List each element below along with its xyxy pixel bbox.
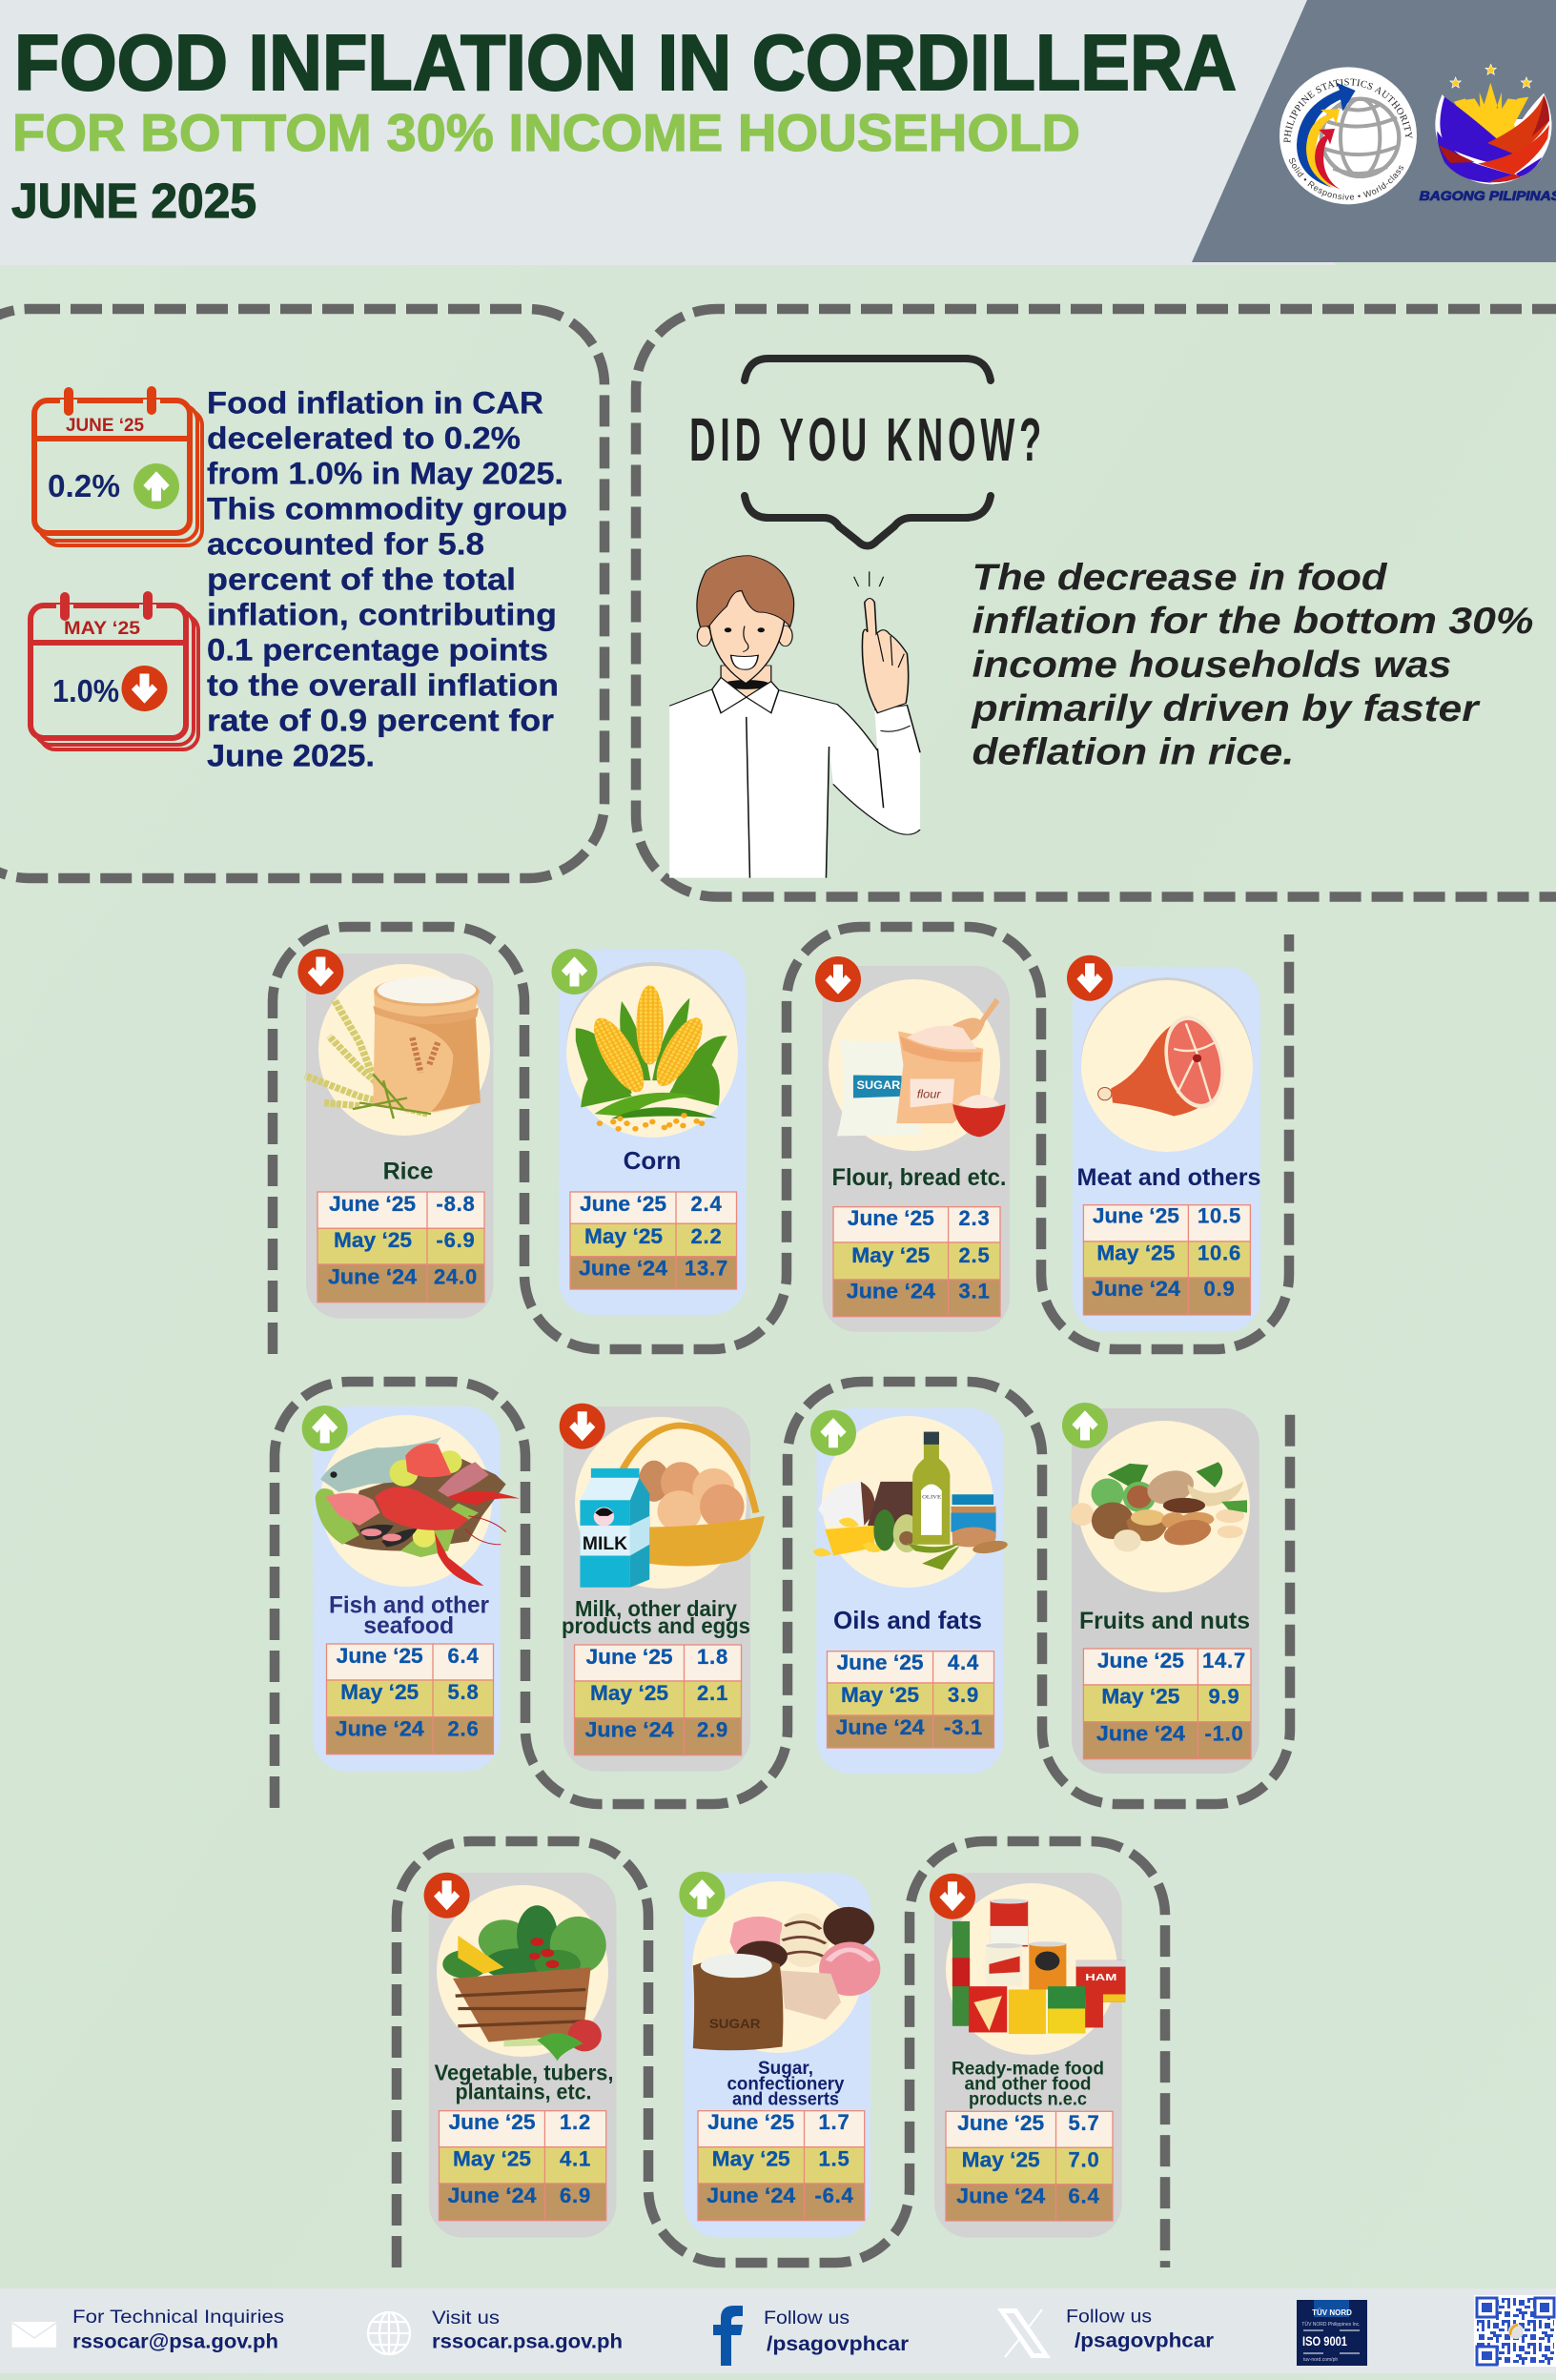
table <box>828 1651 993 1748</box>
text: did you know fact: inflation for the bottom 30% <box>972 601 1533 642</box>
table: 6.4 <box>1069 2185 1099 2208</box>
table: June ‘25 <box>1093 1204 1179 1228</box>
table: June ‘25 <box>580 1192 666 1216</box>
contact: X <box>1066 2308 1214 2352</box>
badge: down arrow <box>930 1874 975 1919</box>
badge: up arrow <box>810 1410 856 1456</box>
table: -8.8 <box>436 1192 476 1216</box>
QR code <box>1474 2295 1556 2367</box>
label: plantains, etc. <box>456 2080 591 2104</box>
table: 2.9 <box>697 1718 728 1742</box>
text: food inflation summary: 0.1 percentage points <box>207 633 548 667</box>
table: May ‘25 <box>340 1680 419 1704</box>
text: food inflation summary: percent of the total <box>207 563 516 597</box>
text: did you know fact: The decrease in food <box>972 557 1388 598</box>
text: food inflation summary: Food inflation in CAR <box>207 385 543 420</box>
date: JUNE 2025 <box>11 174 256 228</box>
table: May ‘25 <box>962 2147 1040 2171</box>
table: June ‘24 <box>328 1265 418 1289</box>
contact: facebook <box>764 2308 909 2355</box>
badge: up arrow <box>302 1405 348 1451</box>
label: Corn <box>624 1146 681 1175</box>
table: 4.4 <box>948 1651 979 1674</box>
table: 0.9 <box>1204 1277 1235 1301</box>
table: June ‘25 <box>848 1206 934 1230</box>
text: food inflation summary: decelerated to 0.2% <box>207 421 521 456</box>
text: food inflation summary <box>207 385 567 773</box>
icon: calendar June 2025: JUNE ‘25 <box>66 416 144 436</box>
badge: down arrow <box>815 956 861 1002</box>
table: 2.1 <box>697 1681 728 1705</box>
icon: vegetable crate <box>442 1905 606 2061</box>
table: 3.1 <box>959 1280 990 1303</box>
label: and other food <box>965 2074 1091 2095</box>
contact: X: /psagovphcar <box>1075 2330 1214 2352</box>
contact: website: rssocar.psa.gov.ph <box>432 2331 623 2353</box>
text: food inflation summary: accounted for 5.8 <box>207 526 484 561</box>
text: food inflation summary: from 1.0% in May 2025. <box>207 456 563 490</box>
contact: website: Visit us <box>432 2308 500 2329</box>
icon: seafood platter <box>316 1437 520 1586</box>
label: Fish and other <box>329 1592 489 1619</box>
table <box>698 2110 865 2221</box>
table: May ‘25 <box>851 1243 930 1267</box>
badge: down arrow <box>560 1404 605 1449</box>
table: May ‘25 <box>1101 1685 1179 1709</box>
icon: canned goods: HAM <box>1085 1972 1116 1982</box>
icon: flour sack: SUGAR <box>857 1079 900 1092</box>
label: Vegetable, tubers, <box>435 2061 614 2085</box>
table <box>833 1206 1000 1317</box>
dashed border: row 2 <box>275 1382 1290 1808</box>
text: food inflation summary: June 2025. <box>207 739 375 773</box>
icon: sugar and sweets: SUGAR <box>709 2016 761 2031</box>
table: 24.0 <box>434 1265 478 1289</box>
table: June ‘24 <box>448 2184 537 2207</box>
table: 6.4 <box>448 1644 479 1668</box>
label: seafood <box>363 1612 454 1639</box>
table <box>946 2111 1113 2221</box>
label <box>329 1592 489 1639</box>
table: June ‘24 <box>847 1280 936 1303</box>
table: June ‘24 <box>585 1718 674 1742</box>
table <box>570 1192 736 1289</box>
badge: up arrow <box>551 949 597 995</box>
badge: ISO 9001: TÜV NORD Philippines Inc. <box>1301 2321 1361 2328</box>
table <box>326 1644 494 1754</box>
table <box>317 1192 484 1303</box>
table: May ‘25 <box>334 1228 412 1252</box>
icon: oils and fats: OLIVE <box>922 1495 942 1500</box>
table: June ‘24 <box>579 1257 668 1281</box>
label: products and eggs <box>562 1613 750 1638</box>
contact: email: For Technical Inquiries <box>72 2308 284 2328</box>
text: did you know fact: primarily driven by faster <box>971 688 1481 729</box>
logo: Bagong Pilipinas: BAGONG PILIPINAS <box>1420 188 1556 203</box>
icon: calendar June 2025 <box>34 391 202 545</box>
table: 5.8 <box>448 1680 479 1704</box>
text: food inflation summary: This commodity group <box>207 492 567 526</box>
text: did you know fact: deflation in rice. <box>972 732 1295 773</box>
table: June ‘25 <box>448 2110 536 2134</box>
table: 4.1 <box>560 2147 591 2171</box>
table: -3.1 <box>944 1715 983 1739</box>
table: May ‘25 <box>841 1683 919 1707</box>
table: 2.4 <box>691 1192 722 1216</box>
dashed border: row 1 <box>273 927 1289 1354</box>
text: food inflation summary: inflation, contributing <box>207 597 557 631</box>
table: May ‘25 <box>453 2147 531 2171</box>
title: FOOD INFLATION IN CORDILLERA <box>14 18 1237 107</box>
table: June ‘24 <box>1096 1722 1186 1746</box>
badge: down arrow <box>424 1873 470 1918</box>
table: May ‘25 <box>1096 1241 1175 1265</box>
table: 9.9 <box>1209 1685 1239 1709</box>
table: 2.6 <box>448 1717 479 1741</box>
table: 7.0 <box>1069 2147 1099 2171</box>
label: Oils and fats <box>833 1606 982 1634</box>
table: 2.5 <box>959 1243 990 1267</box>
icon: oils and fats <box>813 1432 1009 1570</box>
label: Fruits and nuts <box>1079 1608 1250 1634</box>
icon: milk carton and eggs <box>580 1426 765 1588</box>
label: products n.e.c <box>969 2089 1087 2110</box>
card: fruits and nuts <box>1062 1403 1259 1774</box>
text: food inflation summary: rate of 0.9 percent for <box>207 704 554 738</box>
logo: Philippine Statistics Authority: Solid • Responsive • World-class <box>1289 158 1403 200</box>
table: 10.6 <box>1198 1241 1241 1265</box>
label <box>952 2059 1104 2110</box>
speech bubble <box>745 359 991 545</box>
table: 13.7 <box>685 1257 728 1281</box>
contact: email: rssocar@psa.gov.ph <box>72 2331 278 2353</box>
icon: flour sack <box>837 998 1006 1137</box>
label: Rice <box>383 1159 433 1185</box>
icon: nuts <box>1070 1462 1247 1551</box>
subtitle: FOR BOTTOM 30% INCOME HOUSEHOLD <box>12 103 1080 162</box>
icon: rice sack <box>305 976 481 1118</box>
table: May ‘25 <box>590 1681 668 1705</box>
table: 14.7 <box>1202 1649 1246 1672</box>
card: vegetables <box>424 1873 616 2238</box>
label: Sugar, <box>758 2058 813 2079</box>
icon: globe <box>368 2312 410 2354</box>
table: 5.7 <box>1069 2111 1099 2135</box>
panel: food inflation summary <box>0 309 604 878</box>
table: June ‘25 <box>585 1645 673 1669</box>
table: June ‘25 <box>707 2110 794 2134</box>
contact: facebook: Follow us <box>764 2308 850 2329</box>
label: Flour, bread etc. <box>831 1164 1007 1191</box>
illustration: man pointing up <box>669 556 920 878</box>
header panel <box>0 0 1556 265</box>
table: 2.2 <box>691 1224 722 1248</box>
badge: up arrow <box>1062 1403 1108 1448</box>
table <box>574 1645 742 1755</box>
badge: down arrow <box>297 949 343 995</box>
table: June ‘24 <box>835 1715 925 1739</box>
table: -1.0 <box>1204 1722 1244 1746</box>
table: 1.2 <box>560 2110 591 2134</box>
table: June ‘25 <box>837 1651 923 1674</box>
text: food inflation summary: to the overall inflation <box>207 667 559 702</box>
table: May ‘25 <box>584 1224 663 1248</box>
badge: ISO 9001: TÜV NORD <box>1312 2308 1352 2317</box>
card: rice <box>297 949 494 1319</box>
card: milk and eggs <box>560 1404 765 1772</box>
label: confectionery <box>727 2074 845 2095</box>
panel: did you know <box>636 309 1556 896</box>
logo: Philippine Statistics Authority <box>1280 67 1417 204</box>
footer bar <box>0 2288 1556 2373</box>
table: 1.8 <box>697 1645 728 1669</box>
label <box>727 2058 845 2110</box>
table: -6.9 <box>436 1228 476 1252</box>
icon: calendar June 2025: 0.2% <box>48 468 120 503</box>
icon: calendar May 2025: MAY ‘25 <box>64 619 140 639</box>
table <box>439 2110 606 2221</box>
label: Milk, other dairy <box>575 1596 737 1621</box>
icon: X <box>999 2309 1049 2357</box>
table: 2.3 <box>959 1206 990 1230</box>
card: fish and seafood <box>302 1405 520 1772</box>
icon: calendar May 2025 <box>31 596 198 749</box>
label <box>562 1596 750 1638</box>
logo: Bagong Pilipinas <box>1420 64 1556 203</box>
table: 3.9 <box>948 1683 979 1707</box>
card: oils and fats <box>810 1408 1009 1774</box>
dashed border: row 3 <box>397 1841 1165 2267</box>
table: -6.4 <box>814 2184 854 2207</box>
table: June ‘25 <box>1097 1649 1184 1672</box>
label: and desserts <box>732 2089 839 2110</box>
table: June ‘25 <box>337 1644 423 1668</box>
icon: facebook <box>713 2306 743 2366</box>
icon: corn <box>576 985 727 1129</box>
contact: email <box>72 2308 284 2353</box>
icon: envelope <box>11 2322 56 2348</box>
table: June ‘25 <box>957 2111 1044 2135</box>
table: June ‘24 <box>956 2185 1046 2208</box>
badge: ISO 9001 <box>1297 2300 1367 2366</box>
card: meat <box>1067 955 1260 1332</box>
logo: Philippine Statistics Authority: PHILIPPINE STATISTICS AUTHORITY <box>1283 78 1413 143</box>
label <box>435 2061 614 2104</box>
icon: calendar May 2025: 1.0% <box>52 673 119 708</box>
text: did you know fact <box>971 557 1533 773</box>
contact: X: Follow us <box>1066 2308 1152 2328</box>
label: Ready-made food <box>952 2059 1104 2080</box>
heading: did you know: DID YOU KNOW? <box>689 405 1046 474</box>
card: sugar and desserts <box>679 1872 880 2238</box>
table: June ‘24 <box>706 2184 796 2207</box>
icon: milk carton and eggs: MILK <box>583 1533 628 1554</box>
card: ready-made food <box>930 1873 1126 2238</box>
label: Meat and others <box>1077 1164 1260 1191</box>
table: 1.5 <box>819 2147 850 2171</box>
table: June ‘25 <box>329 1192 416 1216</box>
contact: facebook: /psagovphcar <box>767 2333 909 2355</box>
text: did you know fact: income households was <box>972 645 1451 686</box>
icon: flour sack: flour <box>917 1088 942 1100</box>
table: 10.5 <box>1198 1204 1241 1228</box>
badge: ISO 9001: tuv-nord.com/ph <box>1303 2357 1338 2363</box>
card: corn <box>551 949 746 1315</box>
table: 1.7 <box>819 2110 850 2134</box>
icon: canned goods <box>952 1898 1126 2034</box>
card: flour and bread <box>815 956 1010 1332</box>
table: 6.9 <box>560 2184 591 2207</box>
icon: sugar and sweets <box>693 1907 880 2050</box>
table: June ‘24 <box>336 1717 425 1741</box>
badge: up arrow <box>679 1872 725 1918</box>
icon: ham <box>1098 1011 1233 1116</box>
badge: down arrow <box>1067 955 1113 1001</box>
table: May ‘25 <box>712 2147 790 2171</box>
table: June ‘24 <box>1092 1277 1181 1301</box>
contact: website <box>432 2308 623 2353</box>
badge: ISO 9001: ISO 9001 <box>1302 2333 1347 2349</box>
table <box>1083 1204 1250 1315</box>
table <box>1083 1649 1251 1759</box>
